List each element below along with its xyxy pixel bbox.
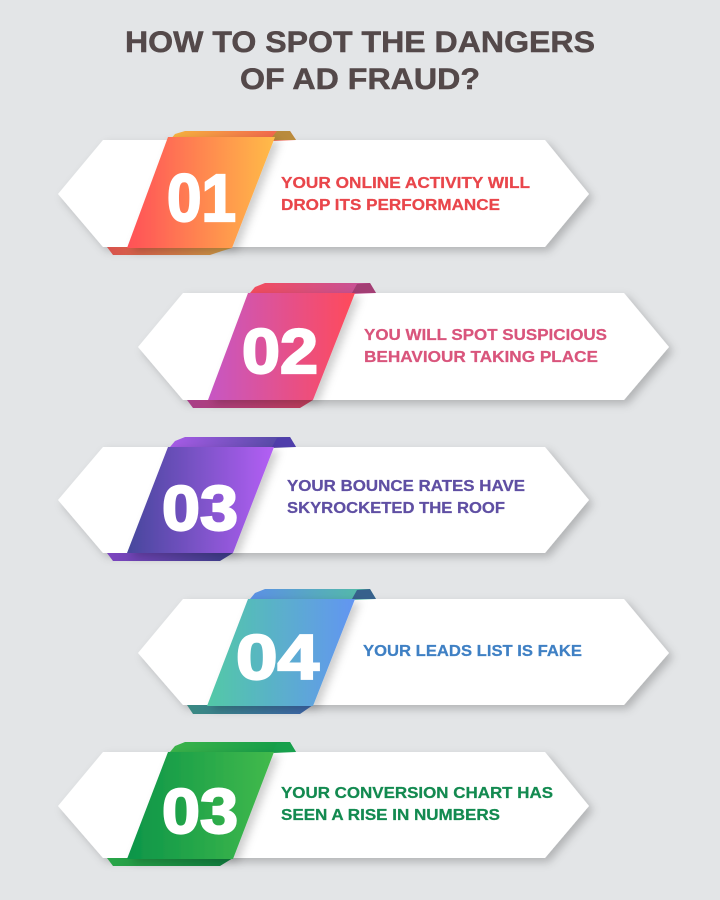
label: step 05 text <box>281 785 553 824</box>
label: step 02 text <box>364 327 607 366</box>
label: step 03 text: YOUR BOUNCE RATES HAVE <box>287 478 525 495</box>
step 02 <box>138 283 669 408</box>
title <box>125 26 595 96</box>
ribbon: step 01 <box>107 131 296 255</box>
label: step 05 text: SEEN A RISE IN NUMBERS <box>281 807 500 824</box>
panel: step 04 arrow band <box>138 599 669 705</box>
label: step 01 text: YOUR ONLINE ACTIVITY WILL <box>281 175 530 192</box>
label: step 05 text: YOUR CONVERSION CHART HAS <box>281 785 553 802</box>
step 05 <box>58 742 589 866</box>
label: step 02 text: YOU WILL SPOT SUSPICIOUS <box>364 327 607 344</box>
panel: step 01 arrow band <box>58 140 589 247</box>
label: step 01 text: DROP ITS PERFORMANCE <box>281 197 500 214</box>
number 04: 04 <box>236 623 319 693</box>
panel: step 02 arrow band <box>138 293 669 400</box>
step 03 <box>58 437 589 561</box>
label: step 02 text: BEHAVIOUR TAKING PLACE <box>364 349 598 366</box>
label: step 01 text <box>281 175 530 214</box>
panel: step 05 arrow band <box>58 752 589 858</box>
label: step 03 text: SKYROCKETED THE ROOF <box>287 500 505 517</box>
number 02: 02 <box>242 317 318 387</box>
label: step 04 text: YOUR LEADS LIST IS FAKE <box>363 643 582 660</box>
step 01 <box>58 131 589 255</box>
ribbon: step 05 <box>107 742 296 866</box>
title: HOW TO SPOT THE DANGERS <box>125 26 595 59</box>
ribbon: step 03 <box>107 437 296 561</box>
ribbon: step 04 <box>187 589 376 714</box>
number 03 (fifth step): 03 <box>162 777 238 847</box>
title: OF AD FRAUD? <box>240 63 480 96</box>
panel: step 03 arrow band <box>58 447 589 553</box>
label: step 03 text <box>287 478 525 517</box>
number 03: 03 <box>162 474 238 544</box>
step 04 <box>138 589 669 714</box>
ribbon: step 02 <box>187 283 376 408</box>
number 01: 01 <box>167 161 236 236</box>
